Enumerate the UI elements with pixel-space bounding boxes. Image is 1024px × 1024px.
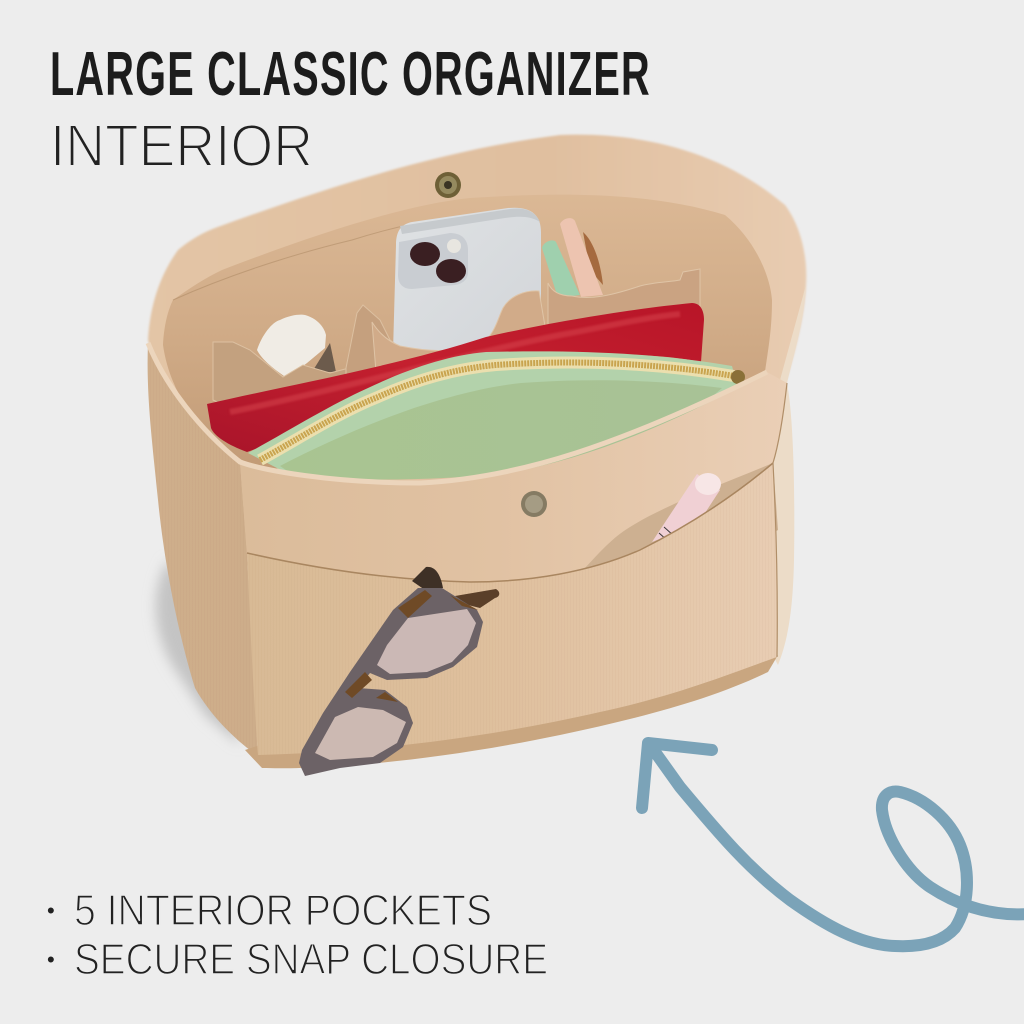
title: LARGE CLASSIC ORGANIZER — [50, 40, 650, 109]
lenses — [410, 242, 440, 266]
green pen — [542, 240, 580, 298]
front panel rim highlight — [148, 343, 767, 483]
subtitle: INTERIOR — [50, 113, 313, 179]
bullet one: 5 INTERIOR POCKETS — [74, 886, 492, 935]
bullet two: • — [47, 947, 55, 972]
left pocket flap — [346, 305, 420, 392]
lower lens — [315, 707, 406, 760]
bottom base strip — [245, 655, 778, 768]
front outer pocket weave — [247, 463, 777, 755]
pocket top seam — [247, 463, 773, 582]
camera island — [398, 233, 468, 289]
feature list — [47, 886, 548, 984]
upper lens — [377, 609, 476, 674]
right pocket — [548, 269, 700, 335]
outer back rim — [148, 135, 806, 560]
zipper teeth — [260, 363, 734, 460]
interior stitch line — [173, 219, 440, 300]
middle pocket — [372, 291, 546, 372]
red wallet — [207, 303, 704, 452]
front outer pocket — [247, 463, 777, 755]
green pouch — [248, 351, 745, 480]
right side band — [770, 285, 806, 665]
pink pen — [560, 218, 603, 297]
pouch leather — [280, 380, 722, 479]
front snap button — [521, 491, 547, 517]
inner pocket dividers — [213, 269, 700, 440]
interior wall — [163, 195, 772, 470]
front panel — [205, 372, 787, 590]
left side wall weave — [148, 343, 258, 756]
phone — [393, 208, 541, 352]
curved arrow pointing to bag — [642, 743, 1024, 946]
zipper tape — [260, 363, 734, 460]
pouch trim — [248, 351, 738, 480]
left pocket — [213, 342, 360, 440]
tortoise patches — [345, 590, 478, 702]
bullet one: • — [47, 898, 55, 923]
sunglasses — [299, 567, 499, 776]
zipper pull — [731, 370, 745, 384]
front pocket opening — [585, 463, 778, 600]
left side wall — [148, 343, 258, 756]
organizer bag illustration — [148, 135, 806, 776]
small pink pen in pocket — [652, 473, 721, 542]
right side seam — [773, 383, 787, 657]
sunglasses temple arm top — [412, 567, 443, 590]
snap button back — [435, 172, 461, 198]
sunglasses temple arm right — [455, 589, 499, 608]
red wallet highlight — [230, 314, 680, 412]
bullet two: SECURE SNAP CLOSURE — [74, 935, 548, 984]
upper frame — [299, 588, 483, 776]
earbuds case — [257, 315, 336, 378]
ground shadow — [156, 560, 240, 745]
